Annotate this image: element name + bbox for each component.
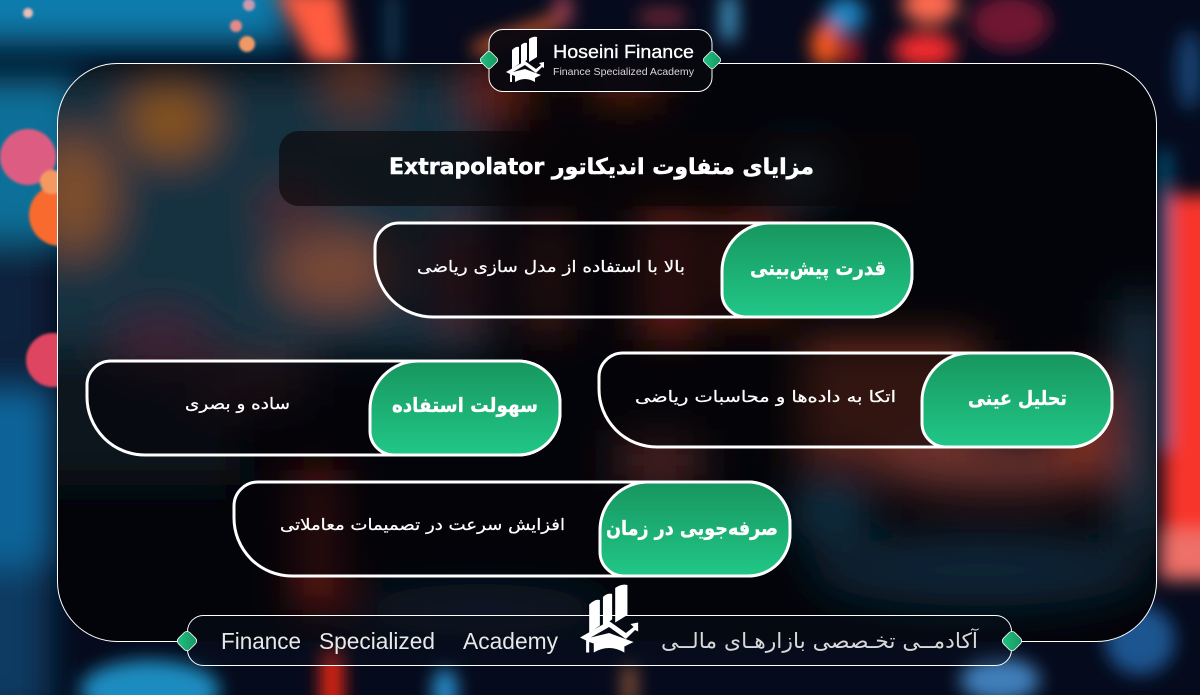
badge label: time saving: صرفه‌جویی در زمان [606,516,778,540]
brand name: Hoseini Finance [553,42,694,62]
card: predictive power [375,223,912,317]
badge: objective analysis [922,353,1112,447]
icon: academy logo [506,37,544,82]
badge label: predictive power: قدرت پیش‌بینی [750,256,886,281]
footer english: Specialized: Specialized [319,628,435,654]
footer english: Finance: Finance [221,628,301,654]
panel outline [58,64,1156,642]
description: ease of use: ساده و بصری [185,394,290,414]
footer english: Academy: Academy [463,628,558,654]
footer bar [176,585,1023,666]
card: ease of use [87,361,560,455]
icon: footer logo [580,585,638,652]
badge label: ease of use: سهولت استفاده [392,393,538,417]
footer persian: آکادمــی تخـصصی بازارهـای مالــی [661,628,979,653]
badge label: objective analysis: تحلیل عینی [968,386,1067,410]
header logo badge [479,30,722,92]
title bar [279,131,921,206]
description: objective analysis: اتکا به داده‌ها و محاسبات ریاضی [635,387,896,407]
brand tagline: Finance Specialized Academy [553,66,695,78]
badge: predictive power [722,223,912,317]
title text: مزایای متفاوت اندیکاتور Extrapolator [389,155,814,180]
icon: right diamond [702,50,722,70]
card: objective analysis [599,353,1112,447]
icon: left diamond [176,630,198,652]
card: time saving [234,482,790,576]
icon: right diamond [1001,630,1023,652]
description: time saving: افزایش سرعت در تصمیمات معاملاتی [280,515,565,535]
description: predictive power: بالا با استفاده از مدل سازی ریاضی [417,257,685,277]
icon: left diamond [479,50,499,70]
badge: time saving [600,482,790,576]
badge: ease of use [370,361,560,455]
